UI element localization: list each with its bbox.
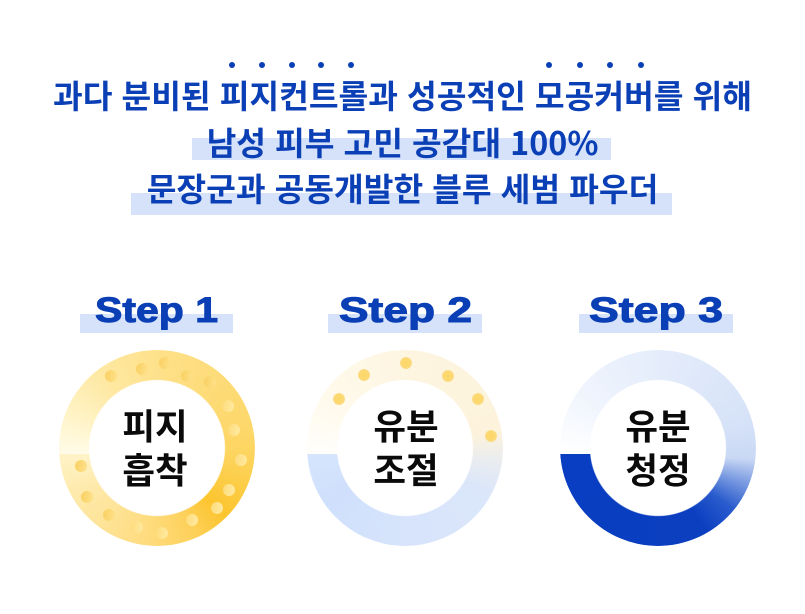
ring label: 조절 <box>373 443 439 494</box>
step 3 ring: oil cleansing <box>560 350 756 546</box>
title text: 남성 피부 고민 공감대 100% <box>207 119 598 165</box>
title block <box>53 62 752 215</box>
yellow gradient ring <box>59 350 255 546</box>
ring label <box>373 399 439 494</box>
ring label <box>122 399 188 494</box>
ring label: 흡착 <box>122 443 188 494</box>
ring label: 청정 <box>625 443 691 494</box>
title text: 문장군과 공동개발한 블루 세범 파우더 <box>147 165 658 211</box>
emphasis dots <box>229 62 644 68</box>
step 2 label <box>328 291 482 333</box>
ring label <box>625 399 691 494</box>
title text: 과다 분비된 피지컨트롤과 성공적인 모공커버를 위해 <box>53 72 752 118</box>
step 2 ring: oil balance <box>307 350 503 546</box>
step 3 label: Step 3 <box>589 291 723 330</box>
step 1 ring: sebum absorption <box>59 350 255 546</box>
step 1 label: Step 1 <box>95 291 218 330</box>
ring label: 유분 <box>373 399 439 450</box>
cream and blue gradient ring <box>307 350 503 546</box>
title text <box>53 72 752 211</box>
step 3 label <box>579 291 733 333</box>
step 1 label <box>80 291 233 333</box>
step labels <box>80 291 733 333</box>
title highlight bars <box>131 138 672 215</box>
ring label: 피지 <box>122 399 188 450</box>
blue gradient ring <box>560 350 756 546</box>
step 2 label: Step 2 <box>339 291 472 330</box>
ring label: 유분 <box>625 399 691 450</box>
